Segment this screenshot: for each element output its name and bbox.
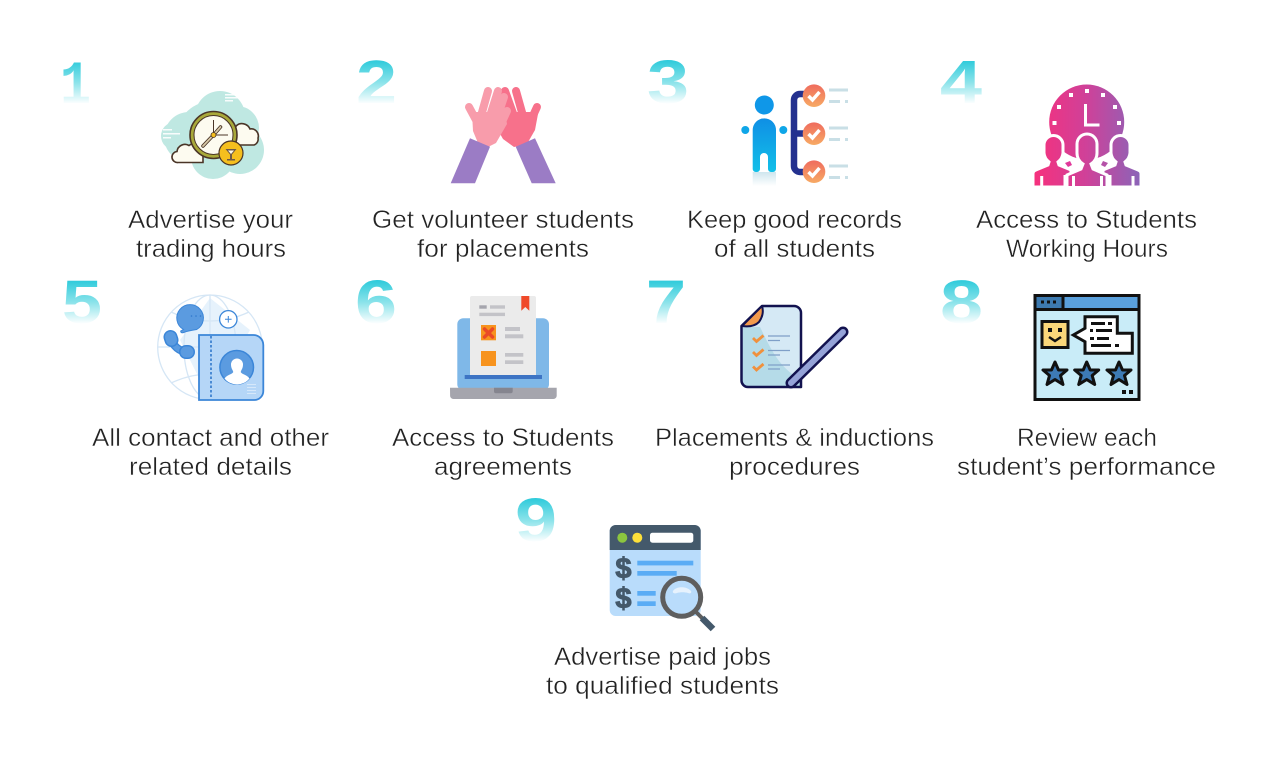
panel: step 4	[940, 48, 1197, 263]
number 8: 8	[940, 268, 983, 336]
label: step 8: student’s performance	[957, 453, 1216, 481]
icon: job listing window with magnifier: $	[615, 583, 632, 615]
label: step 3: Keep good records	[687, 206, 902, 234]
label: step 6: Access to Students	[392, 424, 614, 452]
panel: step 6	[355, 268, 614, 481]
icon: job listing window with magnifier: $	[615, 553, 632, 585]
icon: clock above three people	[1030, 84, 1144, 190]
number 5: 5	[62, 268, 102, 336]
label: step 5: All contact and other	[92, 424, 329, 452]
icon: checklist document and pen	[742, 306, 843, 387]
icon: clock in clouds with cocktail badge	[161, 91, 264, 179]
icon: review window with stars	[1035, 296, 1139, 400]
number 4: 4	[940, 48, 982, 116]
label: step 4: Access to Students	[976, 206, 1197, 234]
label: step 4: Working Hours	[1006, 235, 1168, 263]
label: step 9: Advertise paid jobs	[554, 643, 771, 671]
label: step 6: agreements	[434, 453, 572, 481]
icon: two raised hands	[451, 91, 556, 183]
panel: step 8	[940, 268, 1216, 481]
panel: step 9	[515, 486, 779, 700]
label: step 2: for placements	[417, 235, 589, 263]
label: step 2: Get volunteer students	[372, 206, 634, 234]
panel: step 7	[646, 268, 934, 481]
label: step 9: to qualified students	[546, 672, 779, 700]
number 1: 1	[60, 53, 91, 122]
number 3: 3	[647, 48, 689, 116]
icon: job listing window with magnifier	[610, 525, 713, 629]
panel: step 3	[647, 48, 902, 263]
icon: person with checklist	[741, 84, 848, 186]
number 7: 7	[646, 268, 686, 336]
panel: step 2	[356, 48, 634, 263]
icon: laptop with agreement document	[450, 296, 557, 399]
label: step 5: related details	[129, 453, 292, 481]
label: step 3: of all students	[714, 235, 875, 263]
number 6: 6	[355, 268, 397, 336]
label: step 7: Placements & inductions	[655, 424, 934, 452]
icon: contact book with phone and globe	[158, 295, 263, 400]
label: step 7: procedures	[729, 453, 860, 481]
label: step 1: trading hours	[136, 235, 286, 263]
number 9: 9	[515, 486, 557, 554]
panel: step 5	[62, 268, 329, 481]
panel: step 1	[60, 53, 293, 263]
label: step 8: Review each	[1017, 424, 1157, 452]
label: step 1: Advertise your	[128, 206, 293, 234]
number 2: 2	[356, 48, 397, 116]
